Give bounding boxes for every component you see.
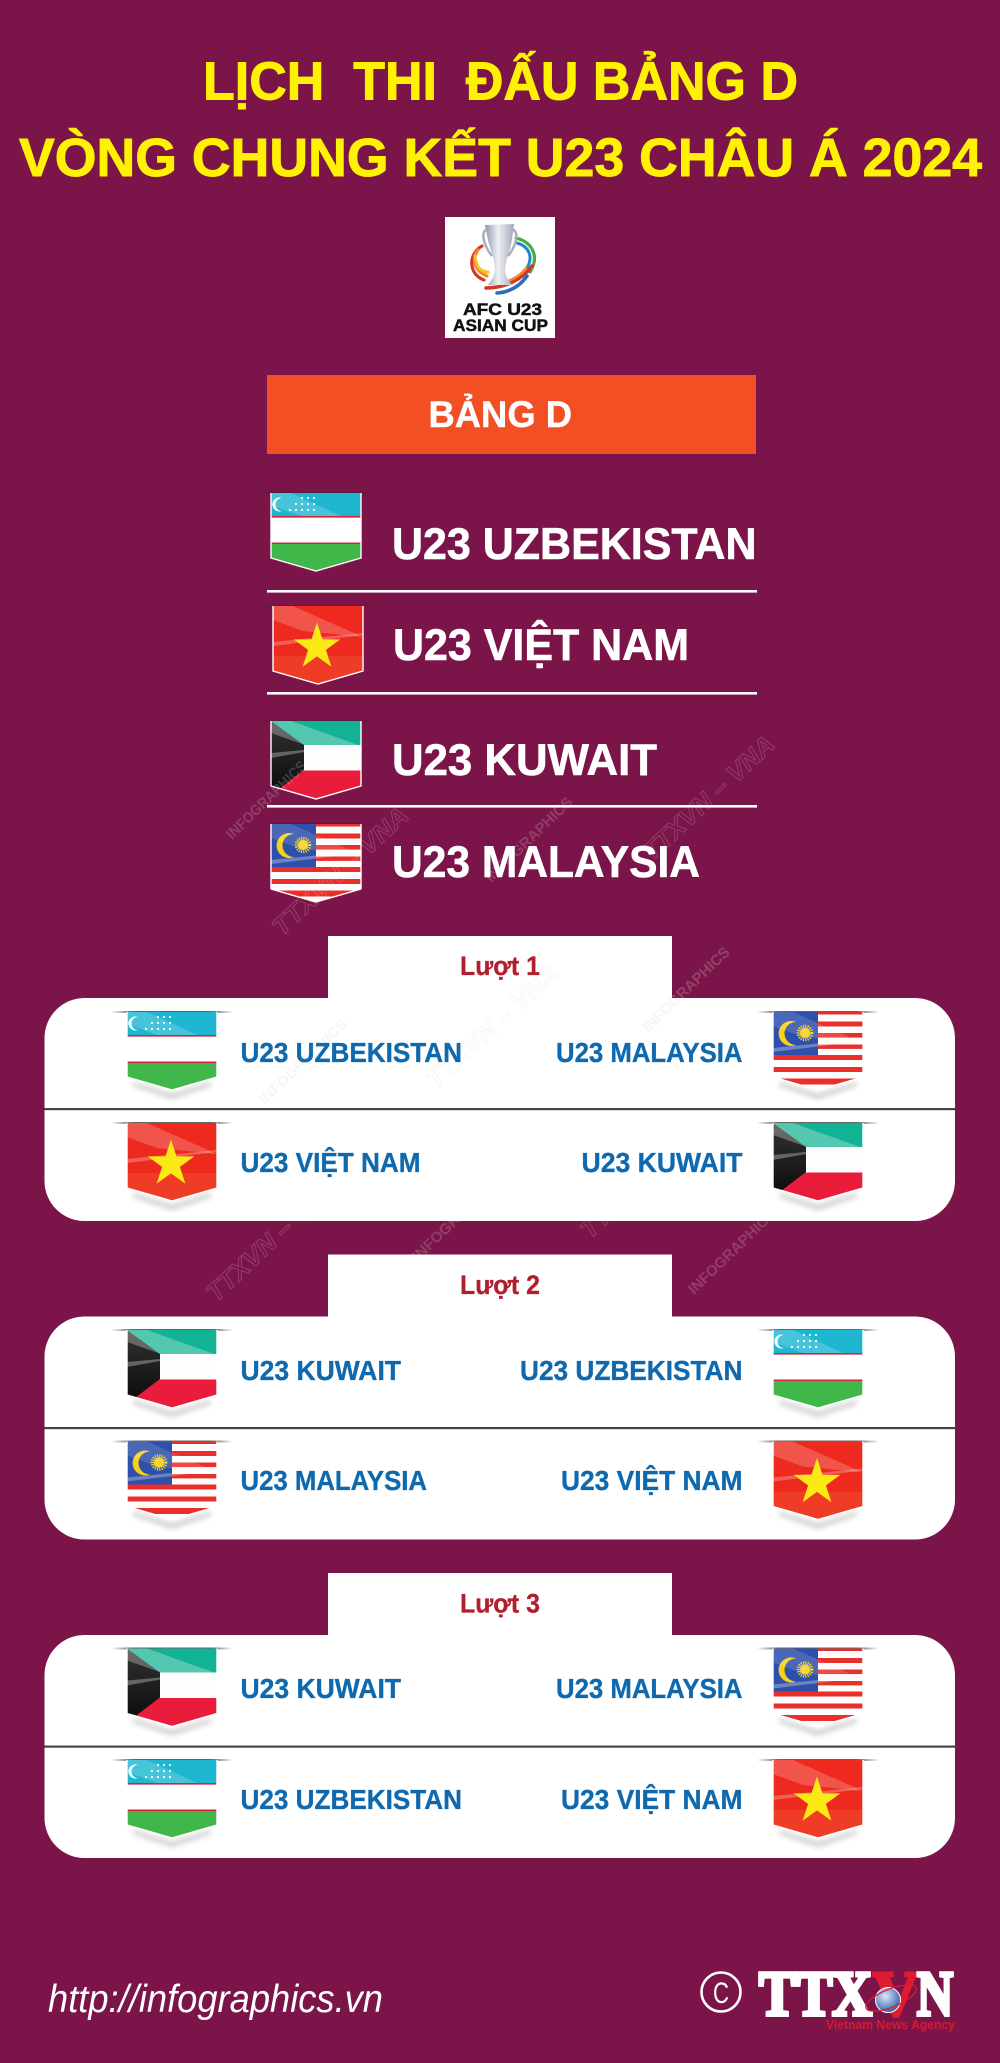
watermarks on background: INFOGRAPHICS — [639, 944, 734, 1036]
watermarks on background: TTXVN – VNA — [637, 730, 780, 866]
logo letters — [759, 1958, 953, 2029]
card: round 3 matches — [44, 1635, 955, 1858]
watermarks on background: INFOGRAPHICS — [685, 1206, 780, 1298]
match 6: Uzbekistan vs Viet Nam: U23 UZBEKISTAN — [240, 1784, 462, 1815]
icon: flag Malaysia — [255, 823, 377, 902]
logo: AFC U23 Asian Cup — [445, 217, 555, 338]
heading bar: Bảng D: BẢNG D — [428, 394, 572, 435]
logo: TTXVN — [759, 1958, 955, 2032]
match 1: Uzbekistan vs Malaysia: U23 UZBEKISTAN — [240, 1037, 462, 1068]
match 1: Uzbekistan vs Malaysia: U23 MALAYSIA — [556, 1037, 742, 1068]
icon: globe — [863, 1980, 919, 2016]
footer url: http://infographics.vn — [48, 1978, 383, 2021]
match 6: Uzbekistan vs Viet Nam — [111, 1759, 879, 1847]
watermarks on background: INFOGRAPHICS — [482, 794, 577, 886]
tab: Lượt 3: Lượt 3 — [460, 1588, 540, 1618]
logo wordmark: ASIAN CUP — [453, 316, 548, 335]
logo wordmark: AFC U23 — [463, 300, 542, 319]
icon: flag Kuwait — [255, 720, 377, 800]
tab: Lượt 2 — [328, 1254, 672, 1318]
tab: Lượt 3 — [328, 1573, 672, 1636]
panel: round 2 — [44, 1254, 955, 1540]
watermarks on cards: TTXVN – VNA — [421, 958, 564, 1094]
tab: Lượt 2: Lượt 2 — [460, 1270, 540, 1300]
card: round 2 matches — [44, 1316, 955, 1540]
logo wordmark — [453, 300, 548, 335]
logo letters: V — [873, 1958, 919, 2029]
match 3: Kuwait vs Uzbekistan: U23 UZBEKISTAN — [520, 1355, 742, 1386]
match 1: Uzbekistan vs Malaysia — [111, 1011, 879, 1099]
watermarks on background: INFOGRAPHICS — [223, 758, 310, 843]
match 4: Malaysia vs Viet Nam: U23 MALAYSIA — [240, 1465, 427, 1496]
watermarks on background — [201, 730, 780, 1307]
match 4: Malaysia vs Viet Nam: U23 VIỆT NAM — [561, 1465, 742, 1496]
panel: round 1 — [44, 936, 955, 1221]
watermarks on background: TTXVN – VNA — [267, 802, 414, 941]
match 6: Uzbekistan vs Viet Nam: U23 VIỆT NAM — [561, 1784, 742, 1815]
watermarks on cards: INFOGRAPHICS — [639, 944, 734, 1036]
panel: team list — [255, 492, 757, 902]
logo letters: N — [917, 1958, 953, 2029]
card: round 1 matches — [44, 998, 955, 1221]
watermarks on cards: INFOGRAPHICS — [256, 1016, 351, 1108]
panel: round 3 — [44, 1573, 955, 1858]
watermarks on cards — [256, 944, 734, 1108]
icon: copyright — [702, 1972, 740, 2012]
match 2: Viet Nam vs Kuwait: U23 VIỆT NAM — [240, 1147, 420, 1178]
icon: flag Uzbekistan — [255, 492, 377, 571]
icon: copyright: C — [713, 1977, 729, 2010]
icon: flag Viet Nam — [257, 605, 379, 684]
match 2: Viet Nam vs Kuwait: U23 KUWAIT — [582, 1147, 742, 1178]
watermarks on background: TTXVN – VNA — [575, 1108, 718, 1244]
icon: ribbons around trophy — [472, 238, 534, 293]
title line 1: LỊCH THI ĐẤU BẢNG D — [203, 52, 798, 112]
team: Viet Nam: U23 VIỆT NAM — [393, 620, 689, 670]
heading bar: Bảng D — [267, 375, 756, 454]
watermarks on background: TTXVN – VNA — [201, 1171, 344, 1307]
match 3: Kuwait vs Uzbekistan — [111, 1329, 879, 1417]
title — [19, 52, 982, 188]
match 2: Viet Nam vs Kuwait — [111, 1122, 879, 1210]
match 5: Kuwait vs Malaysia: U23 KUWAIT — [240, 1673, 401, 1704]
watermarks on background: INFOGRAPHICS — [409, 1171, 506, 1265]
team: Kuwait: U23 KUWAIT — [392, 736, 657, 785]
match 5: Kuwait vs Malaysia: U23 MALAYSIA — [556, 1673, 742, 1704]
title line 2: VÒNG CHUNG KẾT U23 CHÂU Á 2024 — [19, 127, 982, 188]
match 3: Kuwait vs Uzbekistan: U23 KUWAIT — [240, 1355, 401, 1386]
team: Malaysia: U23 MALAYSIA — [392, 838, 700, 887]
tab: Lượt 1 — [328, 936, 672, 999]
team: Uzbekistan: U23 UZBEKISTAN — [392, 520, 756, 569]
logo letters: TTX — [759, 1958, 872, 2029]
match 5: Kuwait vs Malaysia — [111, 1648, 879, 1736]
tab: Lượt 1: Lượt 1 — [460, 951, 540, 981]
match 4: Malaysia vs Viet Nam — [111, 1440, 879, 1528]
logo tagline: Vietnam News Agency — [826, 2018, 955, 2032]
icon: silver trophy — [483, 224, 516, 285]
